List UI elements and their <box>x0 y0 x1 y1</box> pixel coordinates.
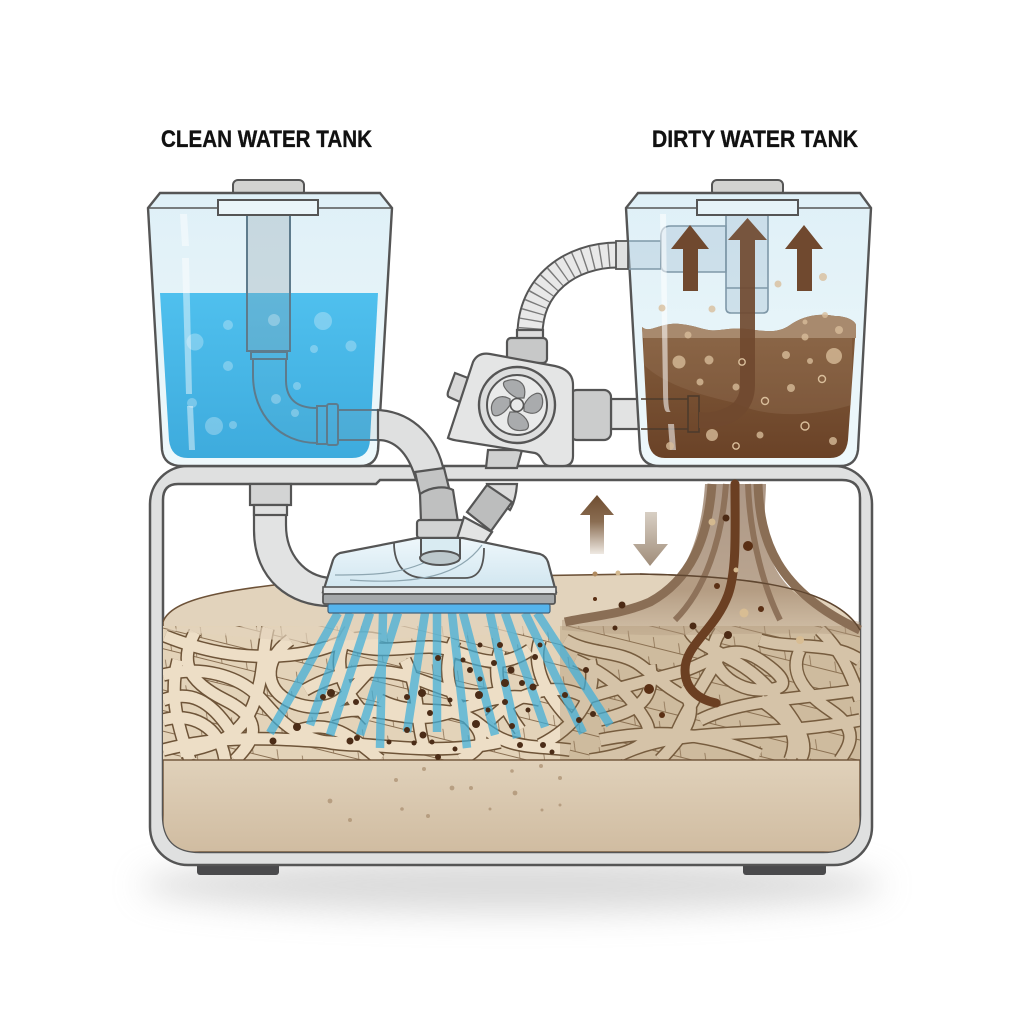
upper sand layer <box>163 573 856 626</box>
tank glass <box>148 193 392 466</box>
tank cap <box>233 180 304 196</box>
clean water tank <box>148 180 392 466</box>
corrugated hose to dirty tank <box>530 255 618 335</box>
mud particles <box>658 273 843 450</box>
tank cap <box>712 180 783 196</box>
mud bubbles <box>733 359 826 449</box>
fan pump <box>448 255 641 466</box>
base frame <box>150 466 872 865</box>
dirty water tank <box>616 180 871 466</box>
nozzle neck <box>421 538 460 558</box>
lower sand layer <box>163 760 860 852</box>
hose from clean tank to cleaning head <box>378 410 464 538</box>
cleaning head <box>323 538 556 613</box>
flange <box>218 200 318 215</box>
feed tube inside tank <box>247 205 380 445</box>
glass highlights <box>660 214 676 450</box>
pump body <box>448 354 573 466</box>
hose from head to pump <box>455 450 522 545</box>
outlet pipe inside tank <box>641 396 699 432</box>
right outlet <box>611 399 641 429</box>
arrow: up, dirt lift <box>580 495 614 554</box>
arrow: up right <box>785 225 823 291</box>
dirty water body <box>642 315 856 458</box>
sediment specks in lower sand <box>328 764 562 822</box>
flange <box>697 200 798 215</box>
root particles <box>583 514 804 718</box>
tank glass <box>626 193 871 466</box>
water jets <box>270 613 610 748</box>
dirt particles lifted by the jets <box>270 642 596 760</box>
head plate <box>323 587 556 594</box>
blue spray bar <box>328 604 550 613</box>
left tab <box>448 373 468 402</box>
glass highlights <box>180 214 195 450</box>
inlet collar <box>616 241 628 269</box>
bubbles <box>186 312 356 435</box>
lower pipe from frame to cleaning head <box>250 484 330 606</box>
water body <box>160 293 378 458</box>
floor shadow <box>140 857 884 913</box>
fan housing <box>479 367 555 443</box>
arrow: down, sand return <box>633 512 668 566</box>
rising central tube and arrow <box>699 218 767 428</box>
sand and fibre filter <box>163 574 860 852</box>
head body <box>323 538 556 592</box>
fan blades <box>491 380 543 430</box>
title: dirty water tank: DIRTY WATER TANK <box>652 126 859 153</box>
top connector <box>517 330 543 339</box>
arrow: up left <box>671 225 709 291</box>
fibre layer <box>163 626 860 760</box>
icon: base feet <box>197 862 826 875</box>
main dark root strand <box>685 484 735 703</box>
title: clean water tank: CLEAN WATER TANK <box>161 126 373 153</box>
dirty roots rising to tank <box>562 484 860 718</box>
connector boxes inside tank <box>628 205 768 313</box>
